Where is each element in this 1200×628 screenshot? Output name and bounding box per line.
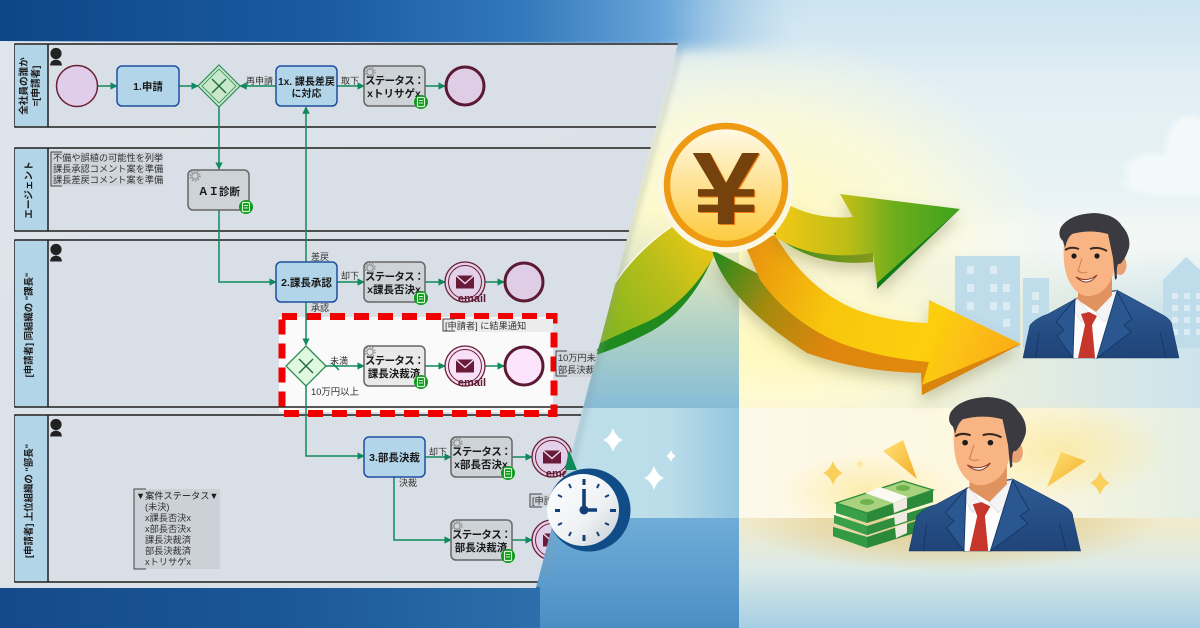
annotation: agent notes: 課長承認コメント案を準備 [53,163,163,174]
background: lower rooms [0,210,1200,628]
task: 1x [276,66,337,106]
labels: highlighted: 10万円以上 [311,386,359,397]
annotation: applicant notice [530,494,550,508]
legend: case status list: 課長決裁済 [145,534,191,545]
task: section chief rejected: ステータス： [365,271,424,283]
arrow: rising green arm into coin [596,227,720,355]
illustration: upper person [1023,213,1179,358]
illustration: lower person [909,397,1081,551]
arrow: green up-right [772,194,960,289]
labels: lane 3: 却下 [341,271,359,281]
decoration: gold shards and sparkles [823,440,1110,495]
task: AI診断: ＡＩ診断 [198,185,240,198]
label: 再申請: 再申請 [246,75,273,86]
task: section chief rejected [364,262,428,305]
panel: BPMN swimlane diagram [0,41,695,588]
annotation: agent notes: 課長差戻コメント案を準備 [53,174,163,185]
lane 4: department head: [申請者] 上位組織の "部長" [23,444,34,558]
annotation: agent notes: 不備や誤植の可能性を列挙 [53,152,163,163]
legend: case status list [134,489,220,569]
annotation: under 100k: 10万円未満は [558,352,614,363]
task: 2.課長承認: 2.課長承認 [281,277,332,289]
icon: stack of banknotes [833,481,933,548]
legend: case status list: 部長決裁済 [145,545,191,556]
task: section chief rejected: x課長否決x [367,283,421,296]
annotation: result notice [443,319,553,332]
task: 1x: 1x. 課長差戻 [278,75,335,88]
annotation: under 100k [556,350,598,377]
email event 2 [445,346,486,389]
annotation: agent notes [51,152,163,186]
lane 1: applicant [15,44,695,127]
task: head approved [451,520,515,563]
background: clouds [1124,116,1200,196]
gateway: top [198,65,240,107]
end event [505,263,543,301]
email event 2: email [458,377,486,389]
icon: clock [547,468,630,552]
panel shadow [545,46,681,575]
task: head approved: ステータス： [452,529,511,541]
task: trigger status: ステータス： [365,75,424,87]
task: 3.部長決裁: 3.部長決裁 [369,451,420,464]
annotation: under 100k: 部長決裁不要 [558,364,613,375]
task: section chief approved [364,346,428,389]
labels: lane 3 [311,251,359,313]
end event [446,67,484,105]
labels: highlighted: 未満 [330,355,348,366]
icon: yen coin: ¥ [692,131,760,246]
legend: case status list: ▼案件ステータス▼ [136,490,218,501]
annotation: applicant notice: [申請者] に結果通知 [532,495,613,506]
labels: highlighted [311,355,359,397]
task: AI診断 [188,170,253,214]
task: trigger status [364,66,428,109]
lane 1: applicant: 全社員の誰か [18,57,30,115]
task: section chief approved: ステータス： [365,355,424,367]
legend: case status list: x部長否決x [145,523,191,534]
email event 1 [445,262,486,305]
email event 3 [532,437,574,480]
buildings [955,256,1200,348]
annotation: result notice: [申請者] に結果通知 [445,320,526,331]
legend: case status list: x課長否決x [145,512,191,523]
arrow: sliver behind clock [565,450,577,470]
connectors [98,86,600,540]
task: section chief approved: 課長決裁済 [368,367,421,380]
arrow: orange down-right [712,235,1021,395]
icon: white sparkles [603,428,676,490]
labels: lane 3: 承認 [311,303,329,313]
task: head approved: 部長決裁済 [455,541,508,554]
labels: lane 3: 差戻 [311,251,329,262]
end event highlighted [505,347,543,385]
label: 取下: 取下 [341,76,359,86]
lane 3: section chief [15,240,695,407]
labels: lane 4: 却下 [429,447,447,457]
lane 2: agent [15,148,695,231]
lane 4: department head [14,414,582,583]
task: 2.課長承認 [276,262,337,302]
lane 3: section chief: [申請者] 同組織の "課長" [23,273,34,377]
email event 3: email [546,468,574,480]
legend: case status list: (未決) [145,501,170,512]
lane 2: agent: エージェント [24,161,35,219]
task: 1x: に対応 [292,87,322,100]
icon: yen coin [658,117,794,253]
task: head rejected: ステータス： [452,446,511,458]
task: 1.申請 [117,66,179,106]
labels: lane 4 [399,447,447,488]
illustration: lower person with savings [823,397,1110,551]
task: 1.申請: 1.申請 [133,80,163,93]
highlight: red dashed box [279,316,554,414]
gateway: highlighted [286,346,326,386]
task: head rejected [451,437,515,480]
email event 1: email [458,293,486,305]
task: trigger status: xトリサゲx [367,87,421,100]
email event 4 [531,520,552,559]
start event [56,66,98,106]
labels: lane 4: 決裁 [399,477,417,488]
task: 3.部長決裁 [364,437,425,477]
legend: case status list: xトリサゲx [145,556,191,567]
task: head rejected: x部長否決x [454,458,508,471]
lane 1: applicant: =[申請者] [30,66,42,106]
